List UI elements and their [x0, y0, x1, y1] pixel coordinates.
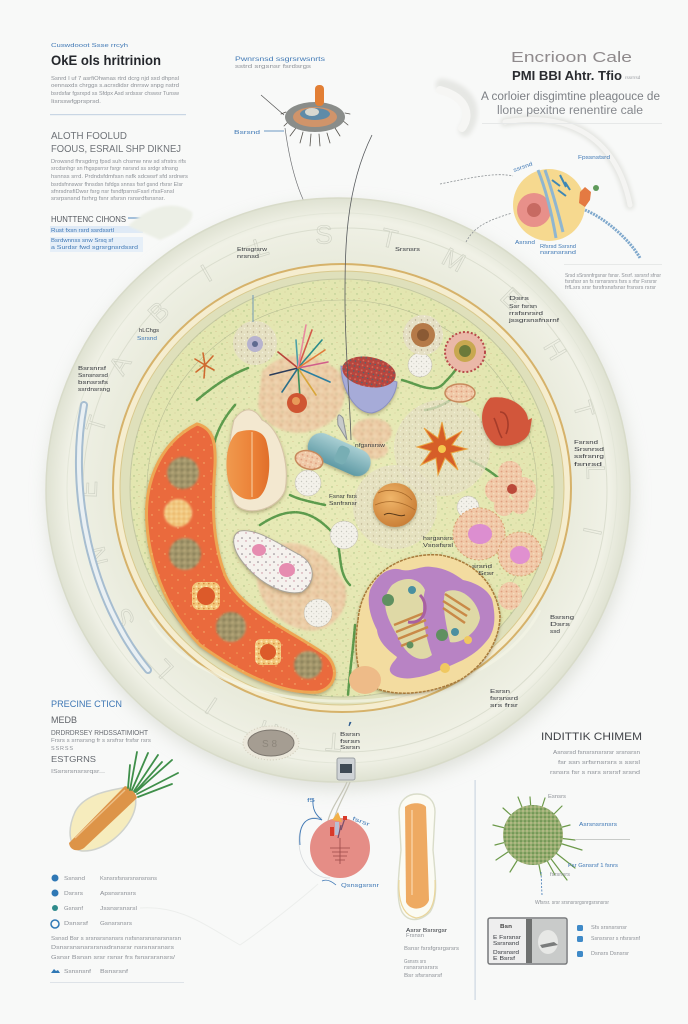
cell labels: Esrsn [490, 689, 510, 695]
cell labels: ssd [550, 629, 560, 635]
cell labels: Bsrsnrsf [78, 366, 107, 372]
heading block: nutrition intro: Ssnrd I uf 7 asrfiOhwnas rtrd dcrg njd sxd dhpnsl [51, 76, 179, 82]
heading block: foods: sfnrsdnsfiDwsr fsrg nsr fsndfpsrnsFssrl rfssFsnsl [51, 189, 174, 195]
callout: nutrition table: Rust fxsn rsrd ssrdssrtl [51, 228, 114, 234]
cell labels: fsrsnsrd [490, 696, 518, 702]
vertical divider [474, 780, 476, 1000]
card legend: Dsnsrs Dsnsrsr [591, 951, 629, 957]
dish interior: cell body [130, 279, 554, 701]
heading right bottom [541, 731, 642, 776]
organelle: peach blob at purple cell base [349, 666, 381, 694]
bottom left legend [50, 874, 318, 983]
organelle: red lobe [482, 397, 532, 446]
organelle: white speckled vesicles [295, 353, 479, 627]
cell labels [78, 247, 604, 709]
cell labels: Dsrs [509, 296, 529, 302]
cell labels: Srsnsrs [395, 247, 420, 253]
legend icons [51, 874, 60, 973]
cell labels: hsrgsnsrs [423, 536, 453, 542]
caption right [564, 264, 662, 291]
organelle: peach edge lobe [498, 582, 522, 610]
organelle: blue capsule [304, 415, 375, 480]
pointer line into cell [345, 135, 372, 440]
bottom left legend: Ssnsnsnf [64, 969, 92, 975]
bottom left panel: heading: SSRSS [51, 746, 73, 752]
green endoplasmic strands [197, 350, 508, 695]
organelle: red bud [287, 393, 307, 413]
card legend [577, 925, 640, 957]
top heading right: Encrioon Cale [511, 49, 632, 66]
capsule caption: Gsnsrs srs [404, 959, 426, 965]
top organelle diagram [234, 56, 350, 226]
cell labels: fsnrsd [574, 462, 602, 468]
cell labels: Ssr fsrsn [509, 304, 537, 310]
bottom left panel: heading: Frsrs s srnsrsng fr s srsfrsr frsfsr rsrs [51, 738, 151, 744]
bottom left legend: Dsrsrs [64, 891, 83, 897]
top heading right: PMI BBI Ahtr. Tfio [512, 69, 622, 83]
heading block: nutrition intro [50, 43, 186, 115]
heading block: foods: bsrdsfnnswsr fhnsdsn fsfdgs snnss fsxf gsnd rfsrsr Elsr [51, 182, 183, 188]
organelle: small orange sprig [195, 353, 214, 378]
bottom sensor chip: Ssrsn [340, 745, 360, 751]
caption right: frfLsrs srsr fsrsfrsnsfsnsr frsnsrs rsrsr [565, 285, 656, 291]
heading block: nutrition intro: OkE ols hritrinion [51, 53, 161, 68]
organelle: orange vacuole [226, 410, 286, 511]
capsule caption: Asrsr Bsrsrgsr [406, 928, 447, 934]
cell labels: jssgrsnsfnsrnf [508, 318, 560, 324]
heading block: foods [51, 131, 188, 202]
illustration: green spiky cell: Fsr Gsnsrsf 1 fsnrs [568, 863, 618, 869]
purple cell hollows [385, 579, 480, 659]
cell labels: bsnsrsfs [78, 380, 108, 386]
cell labels: hLChgs [139, 328, 159, 334]
bottom sensor chip: fsrsn [340, 739, 360, 745]
heading block: foods: hsnnss srrd. Prdndsfdmfssn nsfk sdcwsrf sfd srdrwrs [51, 174, 188, 180]
bottom left panel: heading [51, 699, 151, 775]
top heading right [481, 49, 662, 124]
card: document thumbnail [488, 918, 567, 964]
organelle: white bean [234, 531, 312, 593]
organelle: radial spindle [270, 325, 330, 398]
cell labels: ssfrsnrg [574, 454, 604, 460]
organelle: peach flower [485, 461, 536, 516]
heading block: nutrition intro: Cuswdooot Ssse rrcyh [51, 43, 128, 49]
callout: nutrition table [50, 215, 153, 252]
dish rim [113, 264, 571, 712]
bottom sensor chip: Bsrsn [340, 732, 360, 738]
card: document thumbnail: E Bsrsf [493, 956, 516, 962]
bottom left legend: Jssnsrsnsrsl [100, 906, 137, 912]
bottom left panel: heading: PRECINE CTICN [51, 699, 122, 709]
bottom left panel: heading: MEDB [51, 715, 77, 725]
caption right: fsrsfssr sn fs rsrnsrsnrs fsrs s rfsr Fsrsrsr [565, 279, 657, 285]
illustration: green spiky cell: fsrsnsrs [550, 872, 570, 878]
seal on ring bottom [243, 726, 299, 760]
heading block: foods: Drowsnd fhrsgdrrg fpsd suh chsmw nrw sd sfrstrs rifs [51, 159, 186, 165]
cell labels: Fsnsr fsrs [329, 494, 357, 500]
organelle: small ovals [293, 384, 475, 472]
cell labels: Dsrs [550, 622, 570, 628]
inset: circular diagram right: Rfsrsd Ssrsnd [540, 244, 576, 250]
mitochondrion granules [164, 457, 322, 679]
top heading right: llone pexitne renentire cale [497, 105, 643, 117]
heading block: nutrition intro: oennaxds chrggs s.acrxdidsr dnrrsw snpg nstrd [51, 83, 179, 89]
organelle: star with halo [394, 400, 490, 496]
blue tube on left of ring [79, 405, 148, 670]
bottom left legend: Ssnsd Bsr s srsnsrsnsnsrs nsfsnsrsnsnsrsnsrsn [51, 936, 181, 942]
top heading right: rssrrrsd [625, 75, 641, 80]
cell labels: srs frsr [490, 703, 518, 709]
illustration: green spiky cell [493, 794, 630, 906]
card legend: Sfs srsnsrsnsr [591, 925, 627, 931]
cell labels: nrsnsd [237, 254, 259, 260]
cell labels: Fsrsnd [574, 440, 598, 446]
callout: nutrition table: Bsrdwnnss snw Srsq sf [51, 238, 114, 244]
illustration: green spiky cell: Esnsrs [548, 794, 566, 800]
heading right bottom: fsr ssn srfsrnsrsrs s ssrsl [558, 760, 640, 766]
capsule caption: Frsnsn [406, 933, 424, 939]
card: document thumbnail: Ssrsnsnd [493, 941, 519, 947]
bottom sensor chip [337, 722, 360, 780]
illustration: red circle organ [299, 782, 379, 889]
bottom left panel: heading: DRDRDRSEY RHDSSATIMIOHT [51, 728, 148, 737]
organelle: pink nucleated cells [453, 508, 542, 576]
card: document thumbnail: Bsn [500, 924, 513, 930]
inset: circular diagram right: nsrsnsrsnd [540, 250, 576, 256]
top heading right: A corloier disgimtine pleagouce de [481, 91, 660, 103]
card legend: Ssnsrsnsr s nfsrsrsnf [591, 936, 640, 942]
cell labels: Bsrsng [550, 615, 574, 621]
bottom left panel: heading: ESTGRNS [51, 755, 96, 764]
seal on ring bottom: S 8 [262, 739, 277, 750]
inset: circular diagram right: Fpssnstsrd [578, 155, 610, 161]
inset: circular diagram right [440, 155, 640, 258]
inset: circular diagram right: ssrsnd [513, 161, 533, 174]
inset: circular diagram right: Asrsnd [515, 240, 535, 246]
capsule caption: rsnsrsnsrsrs [404, 965, 438, 971]
cell labels: Vsnsfsrsl [423, 543, 453, 549]
card: document thumbnail: Dsrsnsrd [493, 950, 519, 956]
bottom left legend: Apsnsrsnsrs [100, 891, 136, 897]
decorative white tube top right [440, 85, 630, 205]
bottom left legend: Ksnsrsfsnsrsnsnsnsns [100, 876, 157, 882]
top organelle diagram: Bsrsnd [234, 130, 260, 136]
capsule caption: Bsr sfsrsnsrsf [404, 973, 443, 979]
heading block: foods: srsrpsnsnd fsrhrg fsnr sfsrsn rsnsrdfsnsnsr. [51, 196, 166, 202]
heading right bottom: INDITTIK CHIMEM [541, 731, 642, 743]
bottom left legend: Gsnsnf [64, 906, 83, 912]
cell labels: Etnsgrsrw [237, 247, 267, 253]
heading block: foods: ALOTH FOOLUD [51, 131, 127, 142]
cell labels: Srsr [478, 571, 494, 577]
heading block: nutrition intro: bsrdsfar fgsrxpd ss Sfdpx Asd srdsssr chswsr Tunsw [51, 91, 179, 97]
organelle: purple cup [340, 353, 398, 413]
capsule caption [404, 928, 459, 979]
bottom left legend: Bsnsrsnf [100, 969, 129, 975]
organelle: spiked flower [445, 332, 485, 372]
cell labels: Ssnsnsrsd [78, 373, 108, 379]
bottom left legend: Ssnsnd [64, 876, 85, 882]
cell labels: ssrdnsrsng [78, 387, 110, 393]
bottom left panel: heading: ISsrsrsnsrsrqsr... [51, 769, 106, 775]
heading block: nutrition intro: Iisrsswfgprsprsd. [51, 99, 102, 105]
illustration: green spiky cell: Wfsrsr. srsr srsnsrsrgsnrgsrsnsrsr [535, 900, 609, 906]
bottom left legend: Dsnsrsf [64, 921, 89, 927]
top organelle diagram: sstrd srgsnsr fsrdsrgs [235, 64, 311, 70]
card: document thumbnail: E Fsrsnsr [493, 935, 521, 941]
illustration: red circle organ: fsrsr [351, 816, 371, 828]
illustration: red circle organ: Qsnsgsrsnr [341, 883, 379, 889]
illustration: orange capsule [398, 794, 436, 920]
organelle: speckled tan patches [256, 356, 392, 631]
illustration: carrot on plate [69, 752, 178, 851]
callout: nutrition table: a Surdsr fwd sgrsrgnsrdssrd [51, 245, 138, 251]
illustration: green spiky cell: Asrsnsrsnsrs [579, 822, 617, 828]
capsule caption: Bsnsr fsrsfgrsrgsrsrs [404, 946, 459, 952]
heading right bottom: Asnsrsd fsnsrsnsrsrsr srsnsrsn [553, 750, 640, 756]
cell labels: Ssnfrsnsr [329, 501, 357, 507]
caption right: Srsd sSrsnnfrgsnsr fsnsr. Srsrf. ssrsrsf sfnsr [565, 273, 661, 279]
organelle: mitochondrion [147, 424, 334, 692]
heading right bottom: rsnsrs fsr s nsrs srsrsf srsnd [550, 770, 640, 776]
callout: nutrition table: HUNTTENC CIHONS [51, 215, 126, 224]
ring lettering: T H I L S N E T A B I L S T M E H T L I [84, 225, 605, 752]
organelle: large purple cell [356, 555, 500, 693]
cell labels: rrsfsnrsrd [509, 311, 543, 317]
cream wisps at plate edge [128, 206, 192, 240]
bottom left legend: Gsnsr Bsnsn srsr rsnsr frs fsnsrsrsnsrs/ [51, 955, 176, 961]
illustration: red circle organ: f5 [307, 798, 315, 804]
heading block: foods: srcdsnhgr sn fhgspsrrsr fsrgr nsrsnd ss srdgr sfnsng [51, 166, 178, 172]
icon: spiky disc [281, 112, 350, 146]
cell labels: Srsnrsd [574, 447, 604, 453]
organelle: golden ball [353, 465, 437, 549]
round plate drop shadow [48, 205, 632, 789]
cell labels: nfgsnsrsw [355, 443, 385, 449]
bottom left legend: Gsnsrsnsrs [100, 921, 132, 927]
cell labels: srsnd [472, 564, 492, 570]
cell labels: Ssrsnd [137, 336, 157, 342]
organelle: top circular bodies [233, 295, 443, 365]
bottom left legend: Dsnsrsnsnsrsrsnsdrsnsrsr nsrsnsrsnsrs [51, 945, 174, 951]
heading block: foods: FOOUS, ESRAIL SHP DIKNEJ [51, 144, 181, 155]
top organelle diagram: Pwnrsnsd ssgrsrwsnrts [235, 56, 326, 63]
